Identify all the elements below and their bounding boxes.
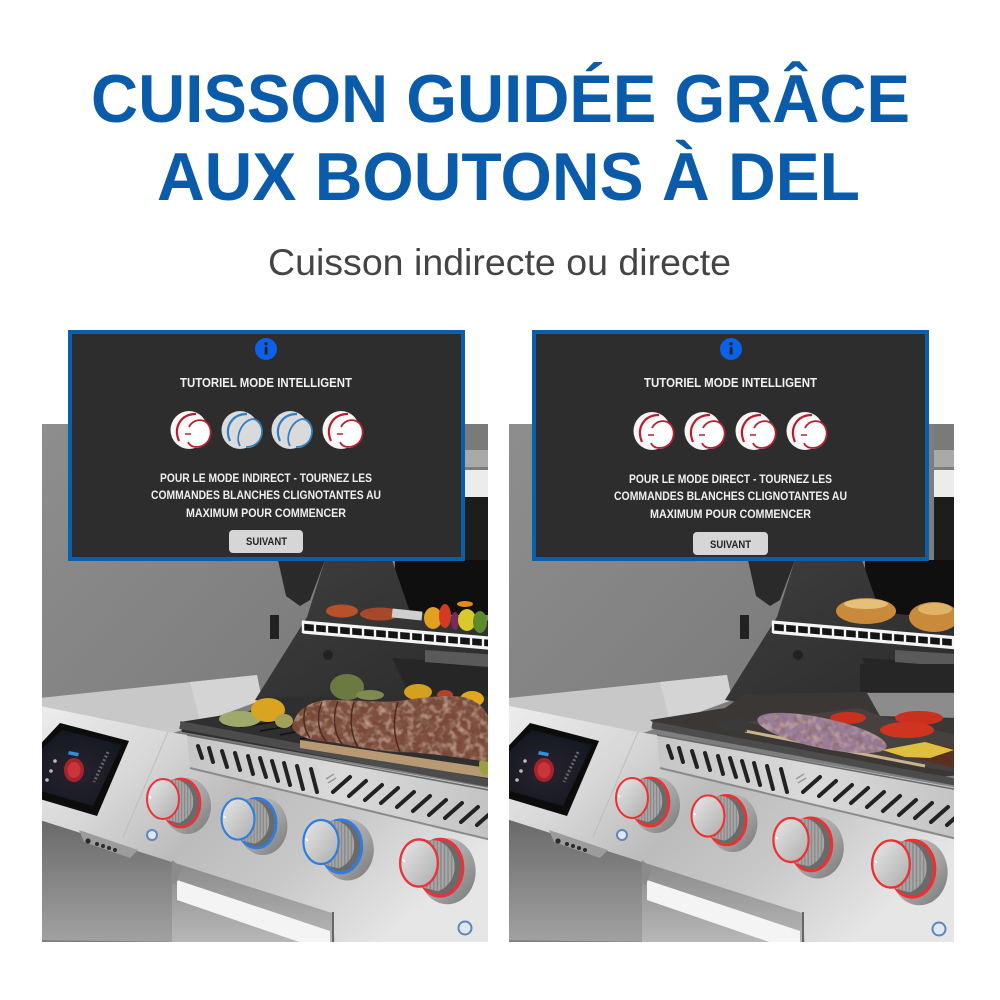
button: SUIVANT bbox=[710, 539, 751, 551]
photo: indirect cooking grill bbox=[30, 424, 510, 944]
panel: indirect mode tutorial bbox=[70, 332, 463, 559]
grate food: lemons and vegetables bbox=[219, 674, 491, 775]
icon: info bbox=[255, 338, 277, 360]
grill firebox with grates bbox=[180, 696, 488, 786]
panel: direct mode tutorial bbox=[534, 332, 927, 559]
burger buns bbox=[836, 598, 959, 632]
title: AUX BOUTONS À DEL bbox=[157, 139, 860, 215]
knob diagram bbox=[634, 412, 827, 450]
knobs: all red bbox=[616, 777, 948, 936]
instruction text: POUR LE MODE INDIRECT - TOURNEZ LES bbox=[160, 471, 372, 485]
icon: info bbox=[720, 338, 742, 360]
instruction text: POUR LE MODE DIRECT - TOURNEZ LES bbox=[629, 472, 832, 486]
upper rack food: sausages and skewers bbox=[326, 601, 487, 633]
photo: direct cooking grill bbox=[500, 424, 980, 944]
button: SUIVANT bbox=[246, 536, 287, 548]
title bbox=[91, 60, 910, 215]
title: CUISSON GUIDÉE GRÂCE bbox=[91, 60, 910, 137]
status buttons bbox=[617, 830, 946, 936]
panel heading: TUTORIEL MODE INTELLIGENT bbox=[644, 376, 817, 390]
button bbox=[693, 532, 768, 555]
status buttons bbox=[147, 830, 472, 934]
instruction text bbox=[614, 472, 847, 521]
griddle food: onions, tomatoes, burger with cheese bbox=[757, 711, 954, 768]
griddle firebox bbox=[650, 664, 960, 783]
instruction text: COMMANDES BLANCHES CLIGNOTANTES AU bbox=[614, 489, 847, 503]
button bbox=[229, 530, 303, 553]
instruction text: MAXIMUM POUR COMMENCER bbox=[186, 506, 346, 520]
knob diagram bbox=[170, 411, 363, 449]
roast meat bbox=[292, 696, 490, 762]
panel heading: TUTORIEL MODE INTELLIGENT bbox=[180, 376, 352, 390]
knobs: red blue blue red bbox=[147, 778, 476, 934]
instruction text: MAXIMUM POUR COMMENCER bbox=[650, 507, 811, 521]
subtitle: Cuisson indirecte ou directe bbox=[268, 242, 731, 283]
instruction text bbox=[151, 471, 381, 520]
instruction text: COMMANDES BLANCHES CLIGNOTANTES AU bbox=[151, 488, 381, 502]
